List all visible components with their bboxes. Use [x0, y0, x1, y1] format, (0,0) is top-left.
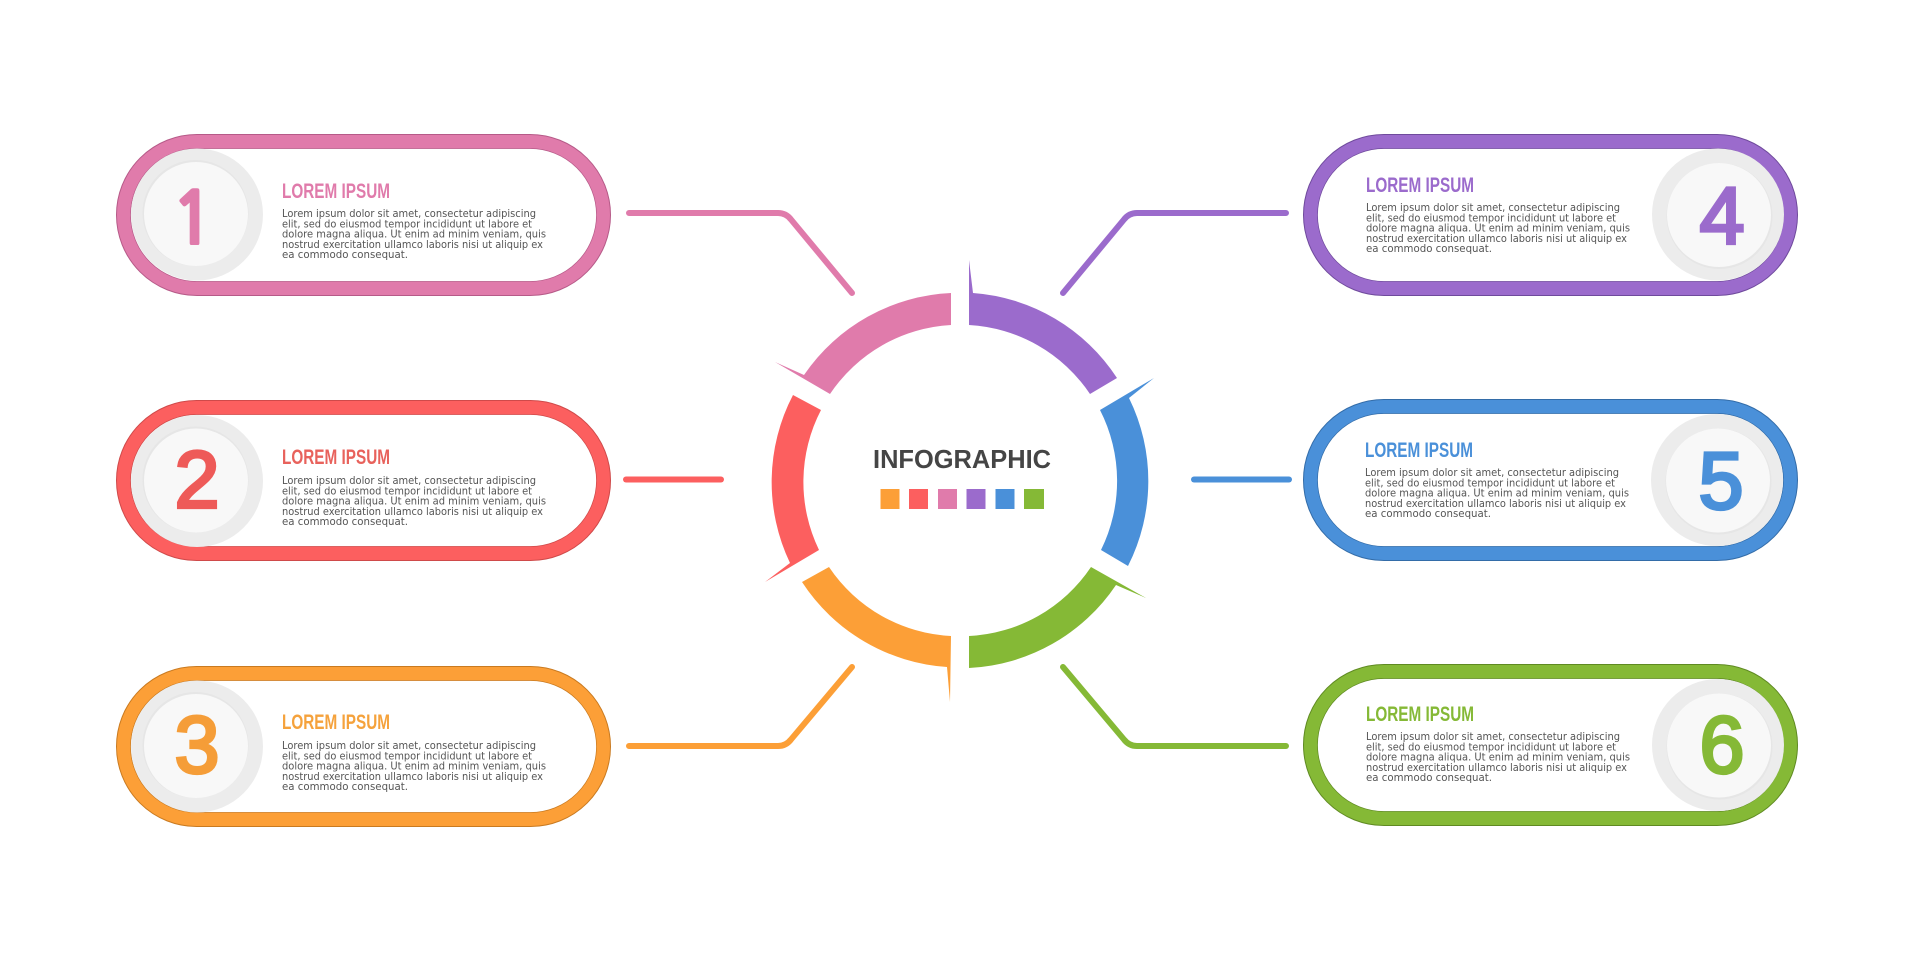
card 2 text block: dolore magna aliqua. Ut enim ad minim veniam, quis — [282, 496, 546, 508]
card 5 number badge — [1651, 414, 1783, 546]
ring segment: green — [969, 567, 1146, 668]
card 4 text block — [1366, 202, 1630, 255]
card 5 heading: LOREM IPSUM — [1365, 439, 1473, 462]
card 1 text block: elit, sed do eiusmod tempor incididunt ut labore et — [282, 218, 532, 230]
card 2 text block: ea commodo consequat. — [282, 516, 408, 528]
card 3 text block: dolore magna aliqua. Ut enim ad minim veniam, quis — [282, 761, 546, 773]
connector: card 1 to ring — [629, 213, 852, 293]
card 6 text block — [1366, 731, 1630, 784]
card 1 text block: nostrud exercitation ullamco laboris nisi ut aliquip ex — [282, 239, 543, 251]
panel: card 3 — [116, 666, 610, 826]
panel: card 2 — [116, 400, 610, 560]
card 2 number badge: 2 — [174, 436, 220, 526]
card 3 text block: ea commodo consequat. — [282, 781, 408, 793]
card 1 text block: dolore magna aliqua. Ut enim ad minim veniam, quis — [282, 229, 546, 241]
card 4 text block: nostrud exercitation ullamco laboris nisi ut aliquip ex — [1366, 233, 1627, 245]
card 5 text block: dolore magna aliqua. Ut enim ad minim veniam, quis — [1365, 488, 1629, 500]
panel: card 6 — [1304, 664, 1798, 826]
card 4 number badge: 4 — [1699, 172, 1745, 262]
card 6 number badge: 6 — [1699, 700, 1745, 790]
card 3 pill border — [116, 666, 610, 826]
card 3 heading: LOREM IPSUM — [282, 711, 390, 734]
card 2 text block: elit, sed do eiusmod tempor incididunt ut labore et — [282, 485, 532, 497]
ring segment: red — [765, 395, 821, 582]
ring segment: pink — [775, 293, 951, 394]
card 6 text block: nostrud exercitation ullamco laboris nisi ut aliquip ex — [1366, 762, 1627, 774]
connector: card 3 to ring — [629, 667, 852, 746]
panel: card 5 — [1304, 400, 1798, 560]
card 5 number badge: 5 — [1698, 436, 1744, 526]
card 1 text block — [282, 208, 546, 261]
connector: card 4 to ring — [1063, 213, 1286, 293]
card 5 text block: Lorem ipsum dolor sit amet, consectetur adipiscing — [1365, 467, 1619, 479]
card 2 pill border — [116, 400, 610, 560]
card 1 pill border — [116, 134, 610, 296]
card 6 text block: dolore magna aliqua. Ut enim ad minim veniam, quis — [1366, 752, 1630, 764]
ring segment: orange — [802, 567, 951, 702]
card 6 text block: Lorem ipsum dolor sit amet, consectetur adipiscing — [1366, 731, 1620, 743]
card 3 text block — [282, 740, 546, 793]
connector: card 5 to ring — [1194, 476, 1289, 482]
card 1 text block: ea commodo consequat. — [282, 249, 408, 261]
card 4 text block: elit, sed do eiusmod tempor incididunt ut labore et — [1366, 212, 1616, 224]
center title: INFOGRAPHIC — [873, 444, 1051, 474]
card 2 number badge — [131, 415, 263, 547]
card 6 number badge — [1652, 679, 1784, 811]
card 5 text block — [1365, 467, 1629, 520]
card 2 heading: LOREM IPSUM — [282, 446, 390, 469]
card 5 text block: elit, sed do eiusmod tempor incididunt ut labore et — [1365, 477, 1615, 489]
card 5 pill border — [1304, 400, 1798, 560]
card 4 number badge — [1652, 148, 1784, 280]
card 3 number badge — [131, 680, 263, 812]
card 6 pill border — [1304, 664, 1798, 826]
card 6 text block: elit, sed do eiusmod tempor incididunt ut labore et — [1366, 741, 1616, 753]
chart: segmented ring — [765, 260, 1154, 702]
connector: card 6 to ring — [1063, 667, 1286, 746]
card 6 heading: LOREM IPSUM — [1366, 703, 1474, 726]
card 3 text block: nostrud exercitation ullamco laboris nisi ut aliquip ex — [282, 771, 543, 783]
card 6 text block: ea commodo consequat. — [1366, 772, 1492, 784]
card 4 text block: dolore magna aliqua. Ut enim ad minim veniam, quis — [1366, 223, 1630, 235]
connector: card 2 to ring — [626, 476, 721, 482]
card 1 heading: LOREM IPSUM — [282, 180, 390, 203]
ring segment: purple — [969, 260, 1117, 394]
card 4 text block: ea commodo consequat. — [1366, 243, 1492, 255]
card 1 number badge — [131, 148, 263, 280]
panel: card 4 — [1304, 134, 1798, 296]
card 3 text block: Lorem ipsum dolor sit amet, consectetur adipiscing — [282, 740, 536, 752]
ring segment: blue — [1100, 378, 1154, 566]
card 3 text block: elit, sed do eiusmod tempor incididunt ut labore et — [282, 750, 532, 762]
card 1 text block: Lorem ipsum dolor sit amet, consectetur adipiscing — [282, 208, 536, 220]
card 4 heading: LOREM IPSUM — [1366, 174, 1474, 197]
card 4 pill border — [1304, 134, 1798, 296]
card 3 number badge: 3 — [174, 700, 220, 790]
center colour legend squares — [880, 489, 1044, 509]
card 2 text block: Lorem ipsum dolor sit amet, consectetur adipiscing — [282, 475, 536, 487]
panel: card 1 — [116, 134, 610, 296]
card 2 text block — [282, 475, 546, 528]
card 5 text block: nostrud exercitation ullamco laboris nisi ut aliquip ex — [1365, 498, 1626, 510]
card 1 number badge: 1 — [171, 183, 215, 255]
card 5 text block: ea commodo consequat. — [1365, 508, 1491, 520]
card 4 text block: Lorem ipsum dolor sit amet, consectetur adipiscing — [1366, 202, 1620, 214]
card 2 text block: nostrud exercitation ullamco laboris nisi ut aliquip ex — [282, 506, 543, 518]
